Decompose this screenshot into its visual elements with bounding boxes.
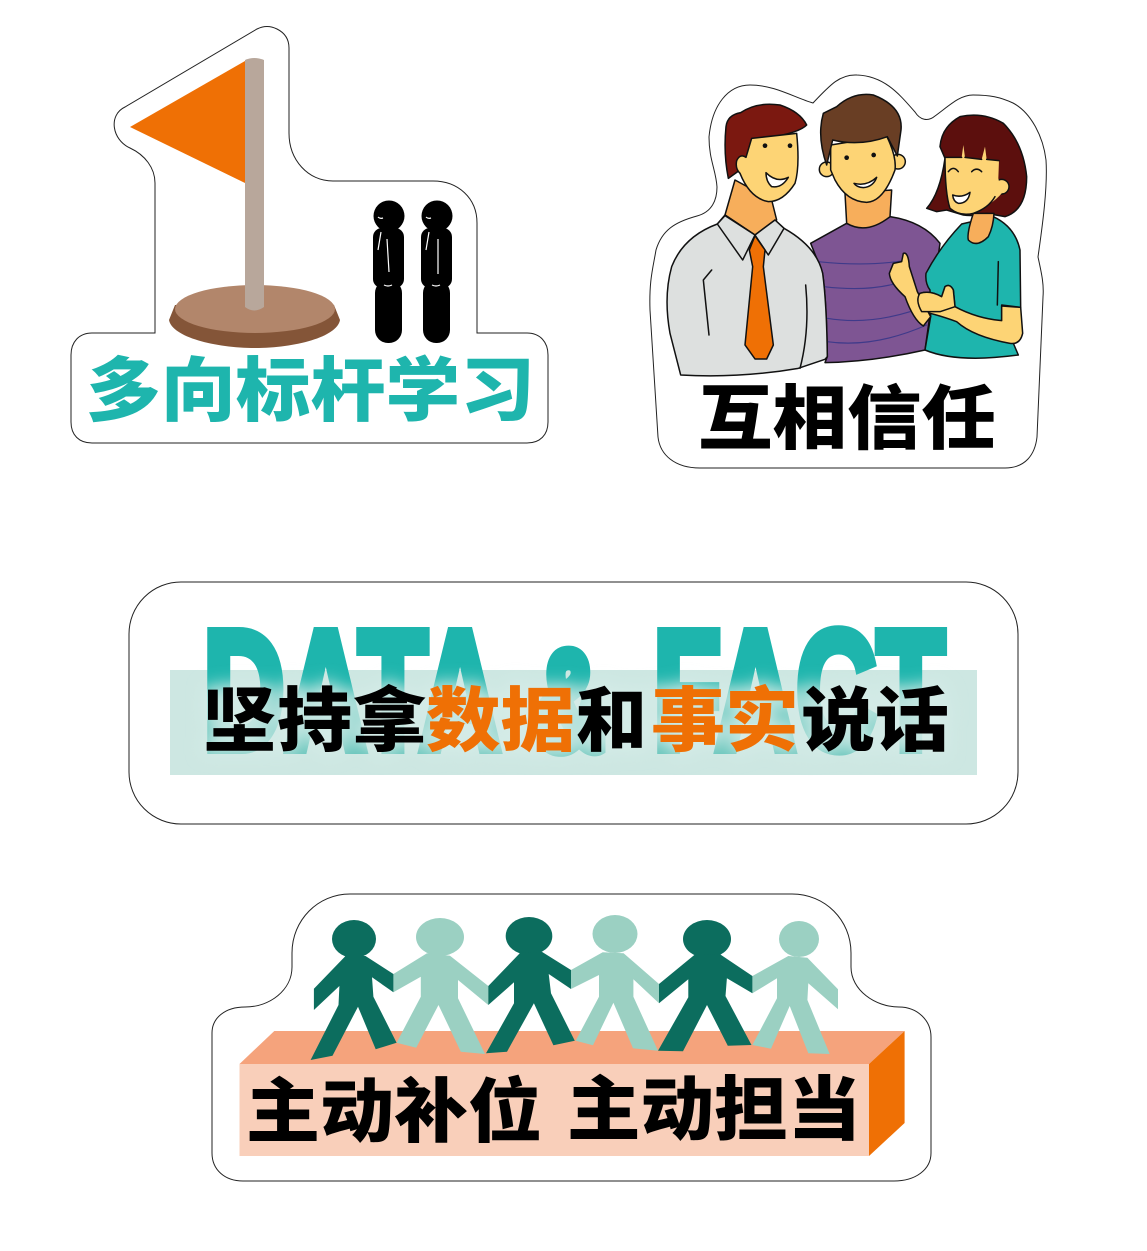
grey shirt man with orange tie xyxy=(667,104,827,376)
slogan: 坚持拿数据和事实说话: 数据 xyxy=(426,682,575,760)
slogan: 主动补位: 主动补位 xyxy=(246,1073,542,1151)
background lettering: DATA & FACT: DATA xyxy=(203,596,501,786)
heading: 互相信任: 互相信任 xyxy=(698,380,996,458)
sticker: proactive responsibility xyxy=(212,894,931,1181)
slogan: 坚持拿数据和事实说话: 事实 xyxy=(651,682,799,760)
slogan: 坚持拿数据和事实说话: 说话 xyxy=(801,682,949,760)
icon: flag on stand xyxy=(130,58,340,348)
sticker outline xyxy=(650,75,1046,468)
slogan: 坚持拿数据和事实说话: 和 xyxy=(576,682,647,760)
icon: paper-chain people xyxy=(311,915,838,1060)
3D block xyxy=(240,1031,905,1156)
slogan: 主动担当: 主动担当 xyxy=(567,1071,861,1149)
purple shirt man xyxy=(811,94,940,363)
sticker outline xyxy=(212,894,931,1181)
pale band xyxy=(170,670,977,775)
sticker outline xyxy=(129,582,1018,824)
background lettering: DATA & FACT: & xyxy=(534,622,604,779)
sticker: mutual trust xyxy=(650,75,1046,468)
teal shirt woman xyxy=(889,115,1027,358)
background lettering: DATA & FACT xyxy=(203,596,945,786)
slogan: 坚持拿数据和事实说话 xyxy=(202,682,949,760)
slogan: 坚持拿数据和事实说话: 坚持拿 xyxy=(202,682,427,760)
heading: 多向标杆学习: 多向标杆学习 xyxy=(86,352,535,430)
background lettering: DATA & FACT: FACT xyxy=(653,596,945,786)
sticker: multi-directional benchmarking xyxy=(71,26,548,443)
text glow: 坚持拿数据和事实说话 xyxy=(202,682,949,760)
sticker: data and facts xyxy=(129,582,1018,824)
illustration: three smiling colleagues xyxy=(667,94,1027,376)
icon: two standing figures xyxy=(373,200,452,343)
sticker outline xyxy=(71,26,548,443)
